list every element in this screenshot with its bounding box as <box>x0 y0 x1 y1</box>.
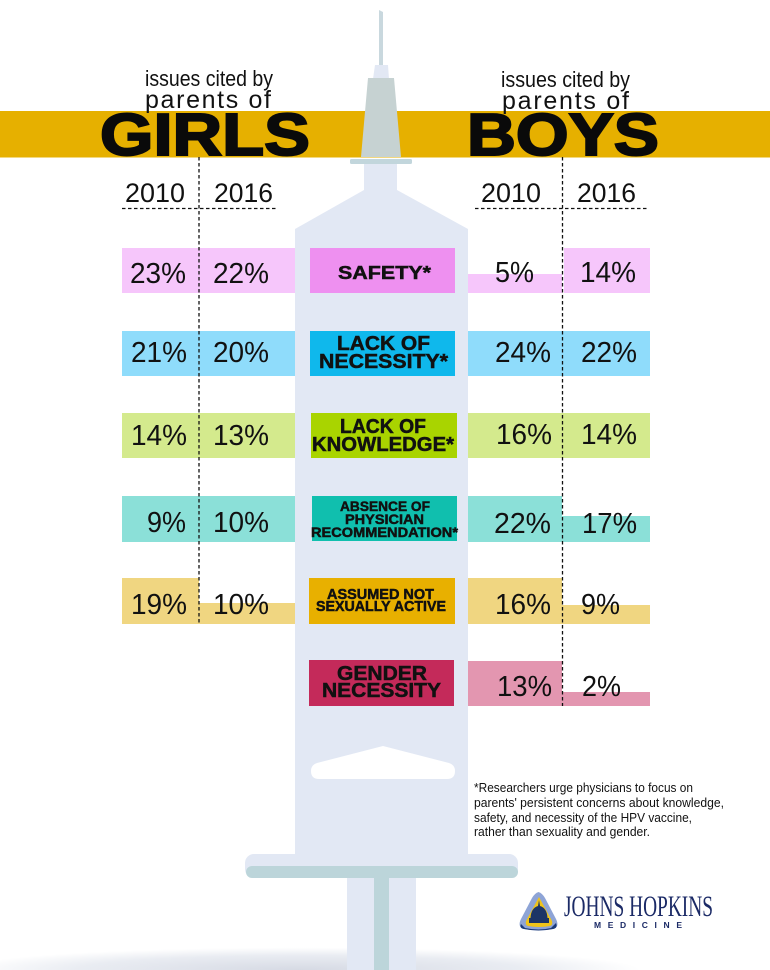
category label: gender necessity: NECESSITY <box>322 680 442 702</box>
physician bar boys 2010 <box>468 496 562 542</box>
category label: lack of knowledge <box>311 413 457 458</box>
parents of: parents of <box>502 87 629 115</box>
boys percentages: 16% <box>495 589 551 621</box>
boys percentages: 17% <box>582 508 637 540</box>
plunger flange <box>245 854 518 878</box>
physician bar girls <box>122 496 295 542</box>
safety bar girls <box>122 248 295 293</box>
category label: lack of necessity: NECESSITY* <box>319 351 448 373</box>
girls percentages: 13% <box>213 420 269 452</box>
category label: assumed not sexually active: ASSUMED NOT <box>327 587 434 603</box>
year labels <box>125 178 636 208</box>
girls percentages: 14% <box>131 420 187 452</box>
category label: safety <box>310 248 455 293</box>
girls percentages: 9% <box>147 507 186 539</box>
category label: lack of knowledge: LACK OF <box>340 416 426 438</box>
plunger flange lower edge <box>246 866 518 878</box>
syringe illustration <box>245 10 518 970</box>
girls percentages: 20% <box>213 337 269 369</box>
knowledge bar boys <box>468 413 650 458</box>
column dividers and year rules <box>122 157 647 706</box>
boys percentages: 13% <box>497 671 552 703</box>
plunger rod <box>347 876 416 970</box>
heading: parents of girls <box>100 66 310 168</box>
not active bar girls 2016 <box>199 603 295 624</box>
boys 2010: 2010 <box>481 178 541 208</box>
girls percentages: 23% <box>130 258 186 290</box>
barrel window <box>311 746 455 779</box>
girls percentages: 21% <box>131 337 187 369</box>
safety bar boys 2010 <box>468 274 562 293</box>
boys percentages: 14% <box>580 257 636 289</box>
category label: absence of physician recommendation: RECOMMENDATION* <box>311 524 459 540</box>
not active bar girls 2010 <box>122 578 199 624</box>
category label: lack of necessity <box>310 331 455 376</box>
footnote: *Researchers urge physicians to focus on <box>474 781 693 795</box>
floor shadow <box>0 925 640 970</box>
category label: absence of physician recommendation: PHYSICIAN <box>345 511 424 527</box>
plunger rod centre <box>374 876 389 970</box>
necessity bar girls <box>122 331 295 376</box>
syringe barrel <box>295 164 468 855</box>
GIRLS: GIRLS <box>100 102 310 168</box>
hub flange <box>350 159 412 164</box>
category label: safety: SAFETY* <box>338 262 432 283</box>
necessity bar boys <box>468 331 650 376</box>
boys data bars <box>468 248 650 706</box>
not active bar boys 2010 <box>468 578 562 624</box>
boys percentages: 2% <box>582 671 621 703</box>
girls percentages: 22% <box>213 258 269 290</box>
gender bar boys 2016 <box>562 692 650 706</box>
category label: absence of physician recommendation: ABSENCE OF <box>340 498 430 514</box>
category label: assumed not sexually active: SEXUALLY ACTIVE <box>316 599 446 615</box>
category label: lack of knowledge: KNOWLEDGE* <box>312 434 454 456</box>
category label: absence of physician recommendation <box>311 496 459 541</box>
footnote: parents' persistent concerns about knowledge, <box>474 796 724 810</box>
girls 2016: 2016 <box>214 178 273 208</box>
parents of: parents of <box>145 86 271 114</box>
footnote: rather than sexuality and gender. <box>474 825 650 839</box>
category label: gender necessity: GENDER <box>337 663 428 685</box>
girls percentages: 10% <box>213 507 269 539</box>
footnote <box>474 781 724 839</box>
Johns Hopkins Medicine logo <box>520 890 713 930</box>
girls percentages: 19% <box>131 589 187 621</box>
boys percentages: 9% <box>581 589 620 621</box>
girls percentages <box>130 258 269 621</box>
boys percentages: 14% <box>581 419 637 451</box>
physician bar boys 2016 <box>562 516 650 542</box>
heading: parents of boys <box>467 67 659 168</box>
boys 2016: 2016 <box>577 178 636 208</box>
needle collar <box>373 65 389 79</box>
category label: lack of necessity: LACK OF <box>337 333 430 355</box>
icon: shield with dome <box>520 892 557 930</box>
girls 2010: 2010 <box>125 178 185 208</box>
knowledge bar girls <box>122 413 295 458</box>
not active bar boys 2016 <box>562 605 650 624</box>
issues cited by: issues cited by <box>145 66 273 91</box>
medicine subtitle: MEDICINE <box>594 920 682 930</box>
category label: gender necessity <box>309 660 454 706</box>
BOYS: BOYS <box>467 102 659 168</box>
boys percentages: 5% <box>495 257 534 289</box>
footnote: safety, and necessity of the HPV vaccine, <box>474 811 692 825</box>
issues cited by: issues cited by <box>501 67 630 92</box>
boys percentages: 22% <box>494 508 551 540</box>
category label: assumed not sexually active <box>309 578 455 624</box>
needle hub <box>361 78 401 157</box>
needle <box>379 10 383 66</box>
girls percentages: 10% <box>213 589 269 621</box>
boys percentages: 22% <box>581 337 637 369</box>
gold header band <box>0 111 770 158</box>
safety bar boys 2016 <box>564 248 650 293</box>
boys percentages: 16% <box>496 419 552 451</box>
gender bar boys 2010 <box>468 661 562 706</box>
boys percentages: 24% <box>495 337 551 369</box>
boys percentages <box>494 257 637 703</box>
girls data bars <box>122 248 295 624</box>
